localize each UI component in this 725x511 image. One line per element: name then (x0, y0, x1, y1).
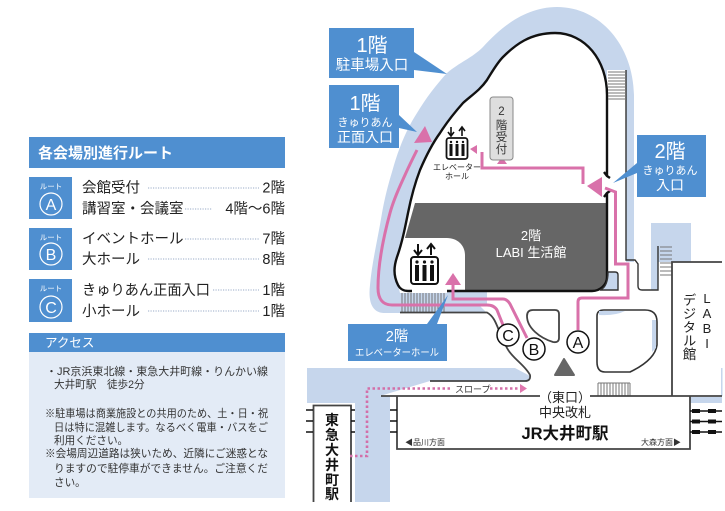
sign: 2F reception: 付 (496, 143, 507, 156)
JR Oimachi station: 大森方面▶ (641, 437, 681, 447)
heading: route list (29, 137, 285, 168)
pink route A (470, 145, 628, 330)
route A rows: 会館受付 (82, 180, 140, 196)
route A rows: 4階～6階 (225, 200, 285, 218)
rail tracks (306, 410, 722, 432)
stairs (402, 72, 672, 396)
route C badge (29, 279, 72, 322)
JR Oimachi station: ◀品川方面 (405, 437, 445, 447)
heading: access (29, 333, 285, 352)
callout: 1F Curian front entrance: 1階 (349, 92, 381, 115)
route C rows: 1階 (262, 303, 285, 320)
parking and road notes: ※会場周辺道路は狭いため、近隣にご迷惑とな (45, 447, 268, 460)
callout: 1F Curian front entrance: 正面入口 (337, 129, 393, 145)
label: elevator hall upper: エレベーター (433, 163, 481, 172)
route A rows (82, 180, 285, 218)
parking and road notes: さい。 (54, 477, 86, 489)
label: elevator hall upper (433, 163, 481, 181)
Tokyu Oimachi station: 大 (325, 442, 339, 458)
route B rows: 8階 (262, 251, 285, 268)
marker: route A: A (573, 335, 584, 352)
Tokyu Oimachi station (314, 406, 351, 502)
route B rows: 7階 (262, 230, 285, 248)
sign: 2F reception: 2 (498, 106, 505, 118)
route A rows: 講習室・会議室 (82, 200, 184, 218)
building walls (394, 33, 658, 291)
callout: 1F Curian front entrance: きゅりあん (338, 116, 392, 129)
heading: access: アクセス (45, 336, 94, 350)
Tokyu Oimachi station: 町 (325, 472, 339, 488)
access directions: 大井町駅 徒歩2分 (54, 378, 145, 391)
callout: 2F Curian entrance: 2階 (654, 140, 686, 163)
Tokyu Oimachi station: 井 (325, 457, 339, 473)
building: LABI Digital: デジタル館 (680, 293, 696, 361)
callout: 2F Curian entrance (613, 135, 706, 197)
route C rows: 1階 (262, 282, 285, 299)
route A rows: 2階 (262, 180, 285, 196)
callout: 1F parking entrance (329, 28, 447, 78)
marker: route A (567, 331, 589, 353)
sign: 2F reception: 受 (496, 131, 507, 144)
gray block: LABI (405, 203, 607, 291)
icon: elevator lower (411, 244, 438, 284)
route C rows: きゅりあん正面入口 (82, 282, 210, 299)
route B rows: イベントホール (82, 232, 184, 248)
route C badge: ルート (40, 284, 62, 293)
route B badge (29, 228, 72, 270)
access directions: ・JR京浜東北線・東急大井町線・りんかい線 (46, 365, 268, 378)
route C badge: C (45, 300, 57, 317)
building: LABI Digital: B (703, 321, 711, 336)
Tokyu Oimachi station: 東 (325, 412, 339, 428)
parking and road notes (45, 407, 268, 489)
route A badge (29, 177, 72, 219)
Tokyu Oimachi station: 駅 (325, 486, 339, 502)
route A badge: A (46, 197, 57, 214)
callout: 1F Curian front entrance (329, 85, 417, 148)
access directions (46, 365, 268, 391)
roads and islands (400, 310, 657, 381)
callout: 1F parking entrance: 駐車場入口 (336, 57, 408, 74)
marker: route C: C (502, 328, 514, 345)
JR Oimachi station: 中央改札 (539, 405, 591, 420)
slope walkway dotted route (348, 384, 527, 456)
route B badge: B (46, 247, 56, 264)
marker: route B (523, 338, 545, 360)
heading: route list: 各会場別進行ルート (38, 144, 173, 162)
marker: route B: B (529, 342, 539, 359)
slope walkway dotted route: スロープ (455, 384, 490, 394)
building: LABI Digital: L (703, 291, 711, 306)
parking and road notes: りますので駐停車ができません。ご注意くだ (54, 462, 268, 475)
panel: route list (29, 137, 285, 322)
building: LABI Digital: I (705, 336, 709, 351)
icon: elevator upper (446, 127, 468, 159)
route C rows (82, 282, 285, 320)
route B badge: ルート (40, 233, 62, 242)
pink route C (378, 126, 503, 325)
callout: 2F elevator hall: 2階 (386, 328, 408, 345)
surrounding pale walkway (307, 7, 722, 502)
building: LABI Digital: A (703, 306, 712, 321)
building: LABI Digital (672, 262, 722, 396)
pink route B (445, 273, 527, 338)
callout: 2F elevator hall: エレベーターホール (355, 347, 439, 359)
gray block: LABI: LABI 生活館 (496, 245, 566, 260)
panel: access (29, 333, 285, 498)
route A badge: ルート (40, 182, 62, 191)
sign: 2F reception (490, 97, 513, 160)
callout: 2F elevator hall (348, 295, 448, 361)
JR Oimachi station: JR大井町駅 (521, 424, 609, 443)
JR Oimachi station (381, 390, 722, 449)
parking and road notes: 利用ください。 (54, 435, 128, 447)
marker: route C (497, 324, 519, 346)
Tokyu Oimachi station: 急 (325, 427, 339, 443)
parking and road notes: 日は特に混雑します。なるべく電車・バスをご (54, 421, 268, 434)
route B rows (82, 230, 285, 268)
map (306, 7, 722, 502)
callout: 2F Curian entrance: きゅりあん (642, 164, 698, 177)
parking and road notes: ※駐車場は商業施設との共用のため、土・日・祝 (45, 407, 268, 420)
callout: 2F Curian entrance: 入口 (656, 177, 684, 193)
label: elevator hall upper: ホール (445, 172, 469, 181)
route B rows: 大ホール (82, 251, 140, 268)
sign: 2F reception: 階 (496, 119, 508, 132)
callout: 1F parking entrance: 1階 (356, 34, 388, 57)
route C rows: 小ホール (82, 303, 140, 320)
gray block: LABI: 2階 (521, 228, 541, 243)
building white interior (394, 33, 626, 313)
JR Oimachi station: （東口） (539, 390, 591, 405)
